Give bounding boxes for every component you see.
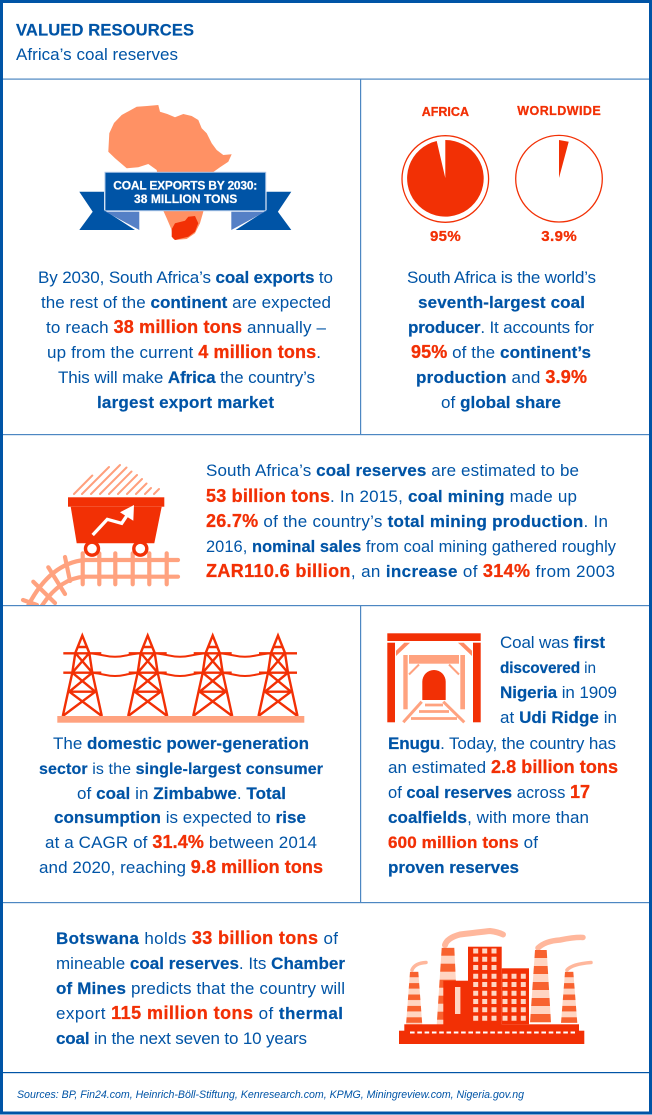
sources: Sources: BP, Fin24.com, Heinrich-Böll-Stiftung, Kenresearch.com, KPMG, Miningreview.com, Nigeria.gov.ng <box>17 1089 524 1101</box>
text: Nigeria reserves: at Udi Ridge in <box>500 708 617 727</box>
panel: Zimbabwe power generation <box>39 636 323 877</box>
text: production share: producer. It accounts for <box>408 318 594 337</box>
icon: mining cart on rails <box>23 465 178 606</box>
text: Nigeria reserves: Nigeria in 1909 <box>500 683 617 702</box>
title <box>16 22 194 64</box>
icon: Africa map with ribbon banner: 38 MILLION TONS <box>134 192 237 206</box>
text: Botswana reserves: mineable coal reserves. Its Chamber <box>56 954 345 973</box>
text: reserves: 53 billion tons. In 2015, coal mining made up <box>206 486 577 506</box>
icon: mine tunnel entrance <box>387 633 481 722</box>
text: production share: production and 3.9% <box>416 367 587 387</box>
text: Nigeria reserves: Coal was first <box>500 633 605 652</box>
text: export forecast: to reach 38 million tons annually – <box>46 317 327 337</box>
text: Nigeria reserves: of coal reserves across 17 <box>388 782 590 802</box>
text: Nigeria reserves: 600 million tons of <box>388 833 538 852</box>
text: Botswana reserves: coal in the next seven to 10 years <box>56 1029 307 1048</box>
text: Nigeria reserves: proven reserves <box>388 858 519 877</box>
icon: Africa map with ribbon banner <box>79 105 291 240</box>
pie chart: Africa 95%: AFRICA <box>422 105 469 119</box>
title: VALUED RESOURCES <box>16 22 194 40</box>
text: export forecast <box>38 268 333 412</box>
text: production share <box>407 268 596 412</box>
text: production share: South Africa is the world’s <box>407 268 596 287</box>
text: Botswana reserves: of Mines predicts that the country will <box>56 979 345 998</box>
text: export forecast: the rest of the continent are expected <box>41 293 331 312</box>
text: production share: 95% of the continent’s <box>411 342 591 362</box>
text: reserves: 2016, nominal sales from coal mining gathered roughly <box>206 538 617 556</box>
text: reserves: South Africa’s coal reserves are estimated to be <box>206 461 579 480</box>
text: Zimbabwe consumption: of coal in Zimbabwe. Total <box>77 784 286 803</box>
text: Nigeria reserves <box>388 633 618 877</box>
panel: coal reserves <box>23 461 617 606</box>
text: Botswana reserves: export 115 million tons of thermal <box>56 1003 343 1023</box>
panel: coal exports <box>38 105 333 412</box>
text: reserves <box>206 461 617 581</box>
panel: Botswana <box>56 928 591 1048</box>
pie chart: Worldwide 3.9%: 3.9% <box>541 228 577 245</box>
icon: Africa map with ribbon banner: COAL EXPORTS BY 2030: <box>113 178 257 192</box>
icon: pylons and power lines <box>57 636 304 723</box>
text: Zimbabwe consumption: and 2020, reaching 9.8 million tons <box>39 857 323 877</box>
text: reserves: ZAR110.6 billion, an increase of 314% from 2003 <box>206 561 615 581</box>
pie chart: Worldwide 3.9% <box>516 104 602 245</box>
icon: factory with chimneys <box>399 931 591 1044</box>
panel: Nigeria coal <box>387 633 618 877</box>
text: production share: seventh-largest coal <box>418 293 585 312</box>
text: Nigeria reserves: coalfields, with more than <box>388 808 589 827</box>
text: reserves: 26.7% of the country’s total mining production. In <box>206 511 608 531</box>
text: Zimbabwe consumption: The domestic power-generation <box>53 734 309 753</box>
text: Zimbabwe consumption <box>39 734 323 877</box>
text: Nigeria reserves: Enugu. Today, the country has <box>388 734 616 753</box>
pie chart: Worldwide 3.9%: WORLDWIDE <box>517 104 601 118</box>
pie chart: Africa 95% <box>402 105 489 245</box>
text: export forecast: By 2030, South Africa’s coal exports to <box>38 268 333 287</box>
text: Zimbabwe consumption: consumption is expected to rise <box>54 808 306 827</box>
text: production share: of global share <box>441 393 561 412</box>
panel: share of production <box>402 104 602 412</box>
text: export forecast: This will make Africa the country’s <box>58 368 315 387</box>
text: Botswana reserves <box>56 928 345 1048</box>
text: Botswana reserves: Botswana holds 33 billion tons of <box>56 928 338 948</box>
pie chart: Africa 95%: 95% <box>430 228 461 245</box>
text: Nigeria reserves: an estimated 2.8 billion tons <box>388 757 618 777</box>
text: Nigeria reserves: discovered in <box>500 660 596 677</box>
text: export forecast: up from the current 4 million tons. <box>47 342 321 362</box>
title: Africa’s coal reserves <box>16 45 178 64</box>
text: export forecast: largest export market <box>97 393 274 412</box>
text: Zimbabwe consumption: sector is the single-largest consumer <box>39 761 323 778</box>
text: Zimbabwe consumption: at a CAGR of 31.4% between 2014 <box>45 832 317 852</box>
